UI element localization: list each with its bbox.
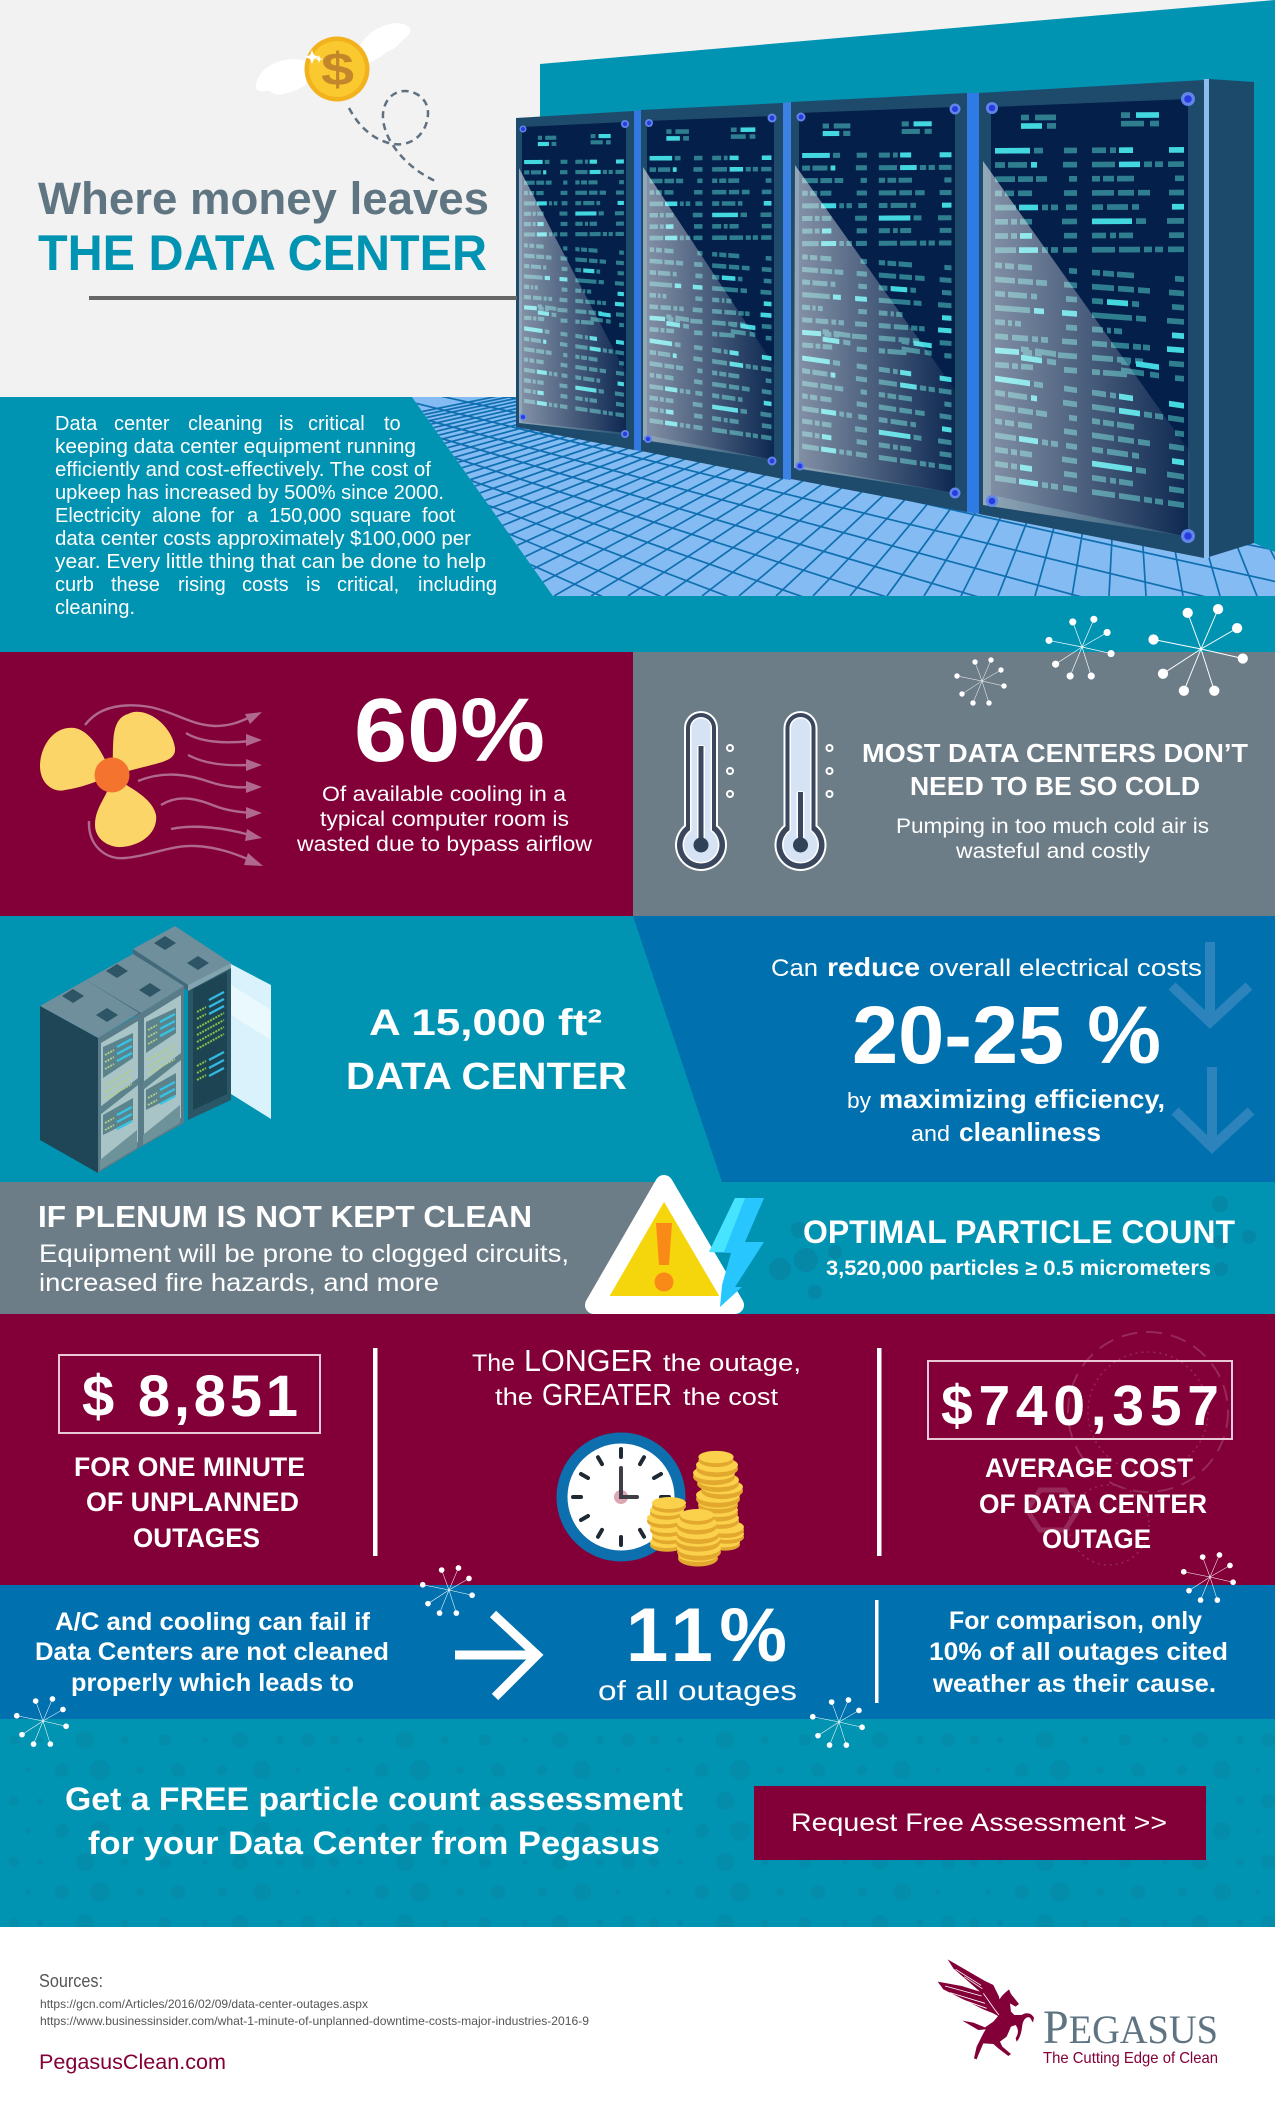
text: plenum consequences: increased fire hazards, and more <box>39 1269 439 1297</box>
caption: average outage: OUTAGE <box>1042 1524 1151 1554</box>
panel: outage cost <box>0 1314 1275 1585</box>
text: cooling can fail: properly which leads to <box>71 1669 354 1697</box>
text: longer outage greater cost: the outage, <box>663 1350 801 1377</box>
intro paragraph: year. Every little thing that can be done to help <box>55 551 486 573</box>
intro paragraph: data center costs approximately $100,000 per <box>55 528 471 550</box>
panel: optimal particle count <box>660 1182 1275 1314</box>
intro paragraph: cleaning. <box>55 597 135 619</box>
intro paragraph: Data <box>55 413 98 435</box>
panel: cooling failure <box>0 1585 1275 1719</box>
text: weather comparison: For comparison, only <box>949 1607 1202 1635</box>
stat box: one minute cost <box>59 1355 320 1433</box>
text: longer outage greater cost: LONGER <box>524 1343 653 1378</box>
button: request assessment: Request Free Assessment >> <box>791 1809 1167 1837</box>
footer background <box>0 1927 1275 2115</box>
intro paragraph: upkeep has increased by 500% since 2000. <box>55 482 444 504</box>
caption: bypass airflow: Of available cooling in a <box>322 783 566 806</box>
icon: faint down arrows <box>1172 942 1251 1147</box>
intro paragraph: center <box>114 413 170 435</box>
caption: one minute outage: OF UNPLANNED <box>86 1487 299 1517</box>
intro paragraph: is <box>306 574 320 596</box>
heading: free assessment: Get a FREE particle count assessment <box>65 1781 683 1817</box>
icon: snowflakes <box>954 604 1248 706</box>
caption: average outage: AVERAGE COST <box>985 1453 1193 1483</box>
icon: winged horse <box>938 1959 1034 2059</box>
text: longer outage greater cost: the <box>495 1384 533 1411</box>
caption: bypass airflow: wasted due to bypass airflow <box>296 833 593 856</box>
heading: plenum: IF PLENUM IS NOT KEPT CLEAN <box>38 1199 532 1234</box>
website link: PegasusClean.com <box>39 2051 226 2074</box>
sources: https://www.businessinsider.com/what-1-minute-of-unplanned-downtime-costs-major-industries-2016-9 <box>40 2014 589 2028</box>
panel: bypass airflow <box>0 652 633 916</box>
text: weather comparison: weather as their cause. <box>932 1670 1216 1698</box>
caption: average outage <box>979 1453 1207 1554</box>
intro paragraph: efficiently and cost-effectively. The cost of <box>55 459 431 481</box>
intro paragraph: is <box>279 413 293 435</box>
panel: call to action <box>0 1719 1275 1927</box>
heading: free assessment: for your Data Center from Pegasus <box>88 1825 660 1861</box>
panel: too cold <box>633 652 1275 916</box>
text: plenum consequences <box>39 1240 569 1297</box>
icon: flying coin with wings: $ <box>321 43 354 95</box>
sources: https://gcn.com/Articles/2016/02/09/data-center-outages.aspx <box>40 1997 368 2011</box>
stat box: one minute cost: $ 8,851 <box>82 1364 298 1429</box>
text: can reduce overall costs: overall electrical costs <box>929 955 1202 982</box>
text: weather comparison: 10% of all outages cited <box>929 1638 1228 1666</box>
text: cooling can fail: Data Centers are not cleaned <box>35 1638 389 1666</box>
caption: one minute outage: FOR ONE MINUTE <box>74 1452 305 1482</box>
icon: thermometer high <box>774 711 832 871</box>
caption: of all outages: of all outages <box>598 1675 797 1706</box>
stat: 11%: 11% <box>626 1593 787 1678</box>
panel: reduce electrical costs <box>633 916 1275 1182</box>
text: can reduce overall costs: reduce <box>827 952 920 982</box>
caption: too cold <box>896 815 1209 863</box>
stat box: average outage cost: $740,357 <box>941 1374 1219 1438</box>
icon: airflow arrows <box>85 705 263 866</box>
text: longer outage greater cost: GREATER <box>542 1377 672 1412</box>
caption: bypass airflow <box>296 783 593 856</box>
text: longer outage greater cost: The <box>472 1350 515 1377</box>
text: longer outage greater cost: the cost <box>683 1384 778 1411</box>
icon: thermometer low <box>675 711 733 871</box>
heading: too cold: MOST DATA CENTERS DON’T <box>862 738 1248 768</box>
title underline <box>89 296 517 300</box>
title: Where money leaves <box>38 173 489 224</box>
intro paragraph: cleaning <box>188 413 263 435</box>
heading: optimal particle count: OPTIMAL PARTICLE COUNT <box>803 1214 1235 1250</box>
intro paragraph: a <box>247 505 259 527</box>
intro paragraph: keeping data center equipment running <box>55 436 416 458</box>
tagline: The Cutting Edge of Clean <box>1043 2050 1218 2067</box>
heading: 15,000 ft² data center: A 15,000 ft² <box>369 1002 602 1043</box>
icon: flying coin with wings <box>256 23 410 102</box>
icon: fan <box>40 712 175 847</box>
icon: coin stacks <box>647 1451 744 1566</box>
text: cooling can fail <box>35 1608 389 1697</box>
floor grid <box>412 397 1275 596</box>
text: longer outage greater cost <box>472 1343 801 1412</box>
text: by maximizing efficiency and cleanliness: cleanliness <box>959 1117 1101 1147</box>
icon: warning triangle <box>594 1184 735 1305</box>
wordmark: PEGASUS <box>1043 2001 1218 2054</box>
intro paragraph: square <box>350 505 411 527</box>
title: THE DATA CENTER <box>38 225 487 281</box>
heading: too cold <box>862 738 1248 801</box>
stat: 60%: 60% <box>354 681 545 781</box>
stat: 20-25 %: 20-25 % <box>852 990 1161 1081</box>
caption: average outage: OF DATA CENTER <box>979 1489 1207 1519</box>
text: by maximizing efficiency and cleanliness: by <box>847 1088 871 1113</box>
intro panel background <box>0 397 1275 652</box>
caption: one minute outage: OUTAGES <box>133 1523 260 1553</box>
panel: plenum warning <box>0 1182 690 1314</box>
intro paragraph: alone <box>152 505 201 527</box>
intro paragraph: foot <box>422 505 456 527</box>
heading: 15,000 ft² data center <box>346 1002 627 1098</box>
heading: too cold: NEED TO BE SO COLD <box>910 771 1200 801</box>
intro paragraph: critical, <box>337 574 399 596</box>
text: particle threshold: 3,520,000 particles ≥ 0.5 micrometers <box>826 1257 1211 1280</box>
intro paragraph: rising <box>178 574 226 596</box>
icon: lightning bolt <box>709 1198 764 1307</box>
icon: sparkle bursts <box>14 1552 1236 1748</box>
title <box>38 173 489 281</box>
intro paragraph: critical <box>308 413 365 435</box>
panel: data center size <box>0 916 1275 1182</box>
icon: server cabinets <box>40 926 271 1173</box>
button: request assessment <box>754 1786 1206 1860</box>
intro paragraph: costs <box>242 574 289 596</box>
intro paragraph: to <box>384 413 401 435</box>
text: cooling can fail: A/C and cooling can fail if <box>55 1608 371 1636</box>
text: by maximizing efficiency and cleanliness: maximizing efficiency, <box>879 1084 1165 1114</box>
intro paragraph: curb <box>55 574 94 596</box>
text: can reduce overall costs: Can <box>771 955 818 982</box>
intro paragraph: Electricity <box>55 505 141 527</box>
intro paragraph: these <box>111 574 160 596</box>
heading: 15,000 ft² data center: DATA CENTER <box>346 1056 627 1098</box>
sources: Sources: <box>39 1971 103 1991</box>
intro paragraph: for <box>211 505 235 527</box>
caption: too cold: Pumping in too much cold air is <box>896 815 1209 838</box>
heading: free assessment <box>65 1781 683 1861</box>
hero background <box>0 0 1275 397</box>
text: by maximizing efficiency and cleanliness <box>847 1084 1165 1147</box>
text: plenum consequences: Equipment will be prone to clogged circuits, <box>39 1240 569 1268</box>
icon: right arrow <box>455 1614 537 1697</box>
text: weather comparison <box>929 1607 1228 1698</box>
server racks illustration <box>516 79 1254 558</box>
sources <box>39 1971 589 2028</box>
logo: Pegasus <box>938 1959 1218 2067</box>
caption: one minute outage <box>74 1452 305 1553</box>
intro paragraph: including <box>418 574 497 596</box>
dashed flight path <box>349 91 435 181</box>
caption: too cold: wasteful and costly <box>955 840 1151 863</box>
caption: bypass airflow: typical computer room is <box>320 808 569 831</box>
intro paragraph <box>55 413 497 619</box>
icon: clock <box>556 1432 686 1562</box>
text: by maximizing efficiency and cleanliness: and <box>911 1121 950 1146</box>
teal back wall <box>540 0 1275 552</box>
text: can reduce overall costs <box>771 952 1202 982</box>
decorative dial <box>1027 1332 1228 1565</box>
intro paragraph: 150,000 <box>269 505 341 527</box>
